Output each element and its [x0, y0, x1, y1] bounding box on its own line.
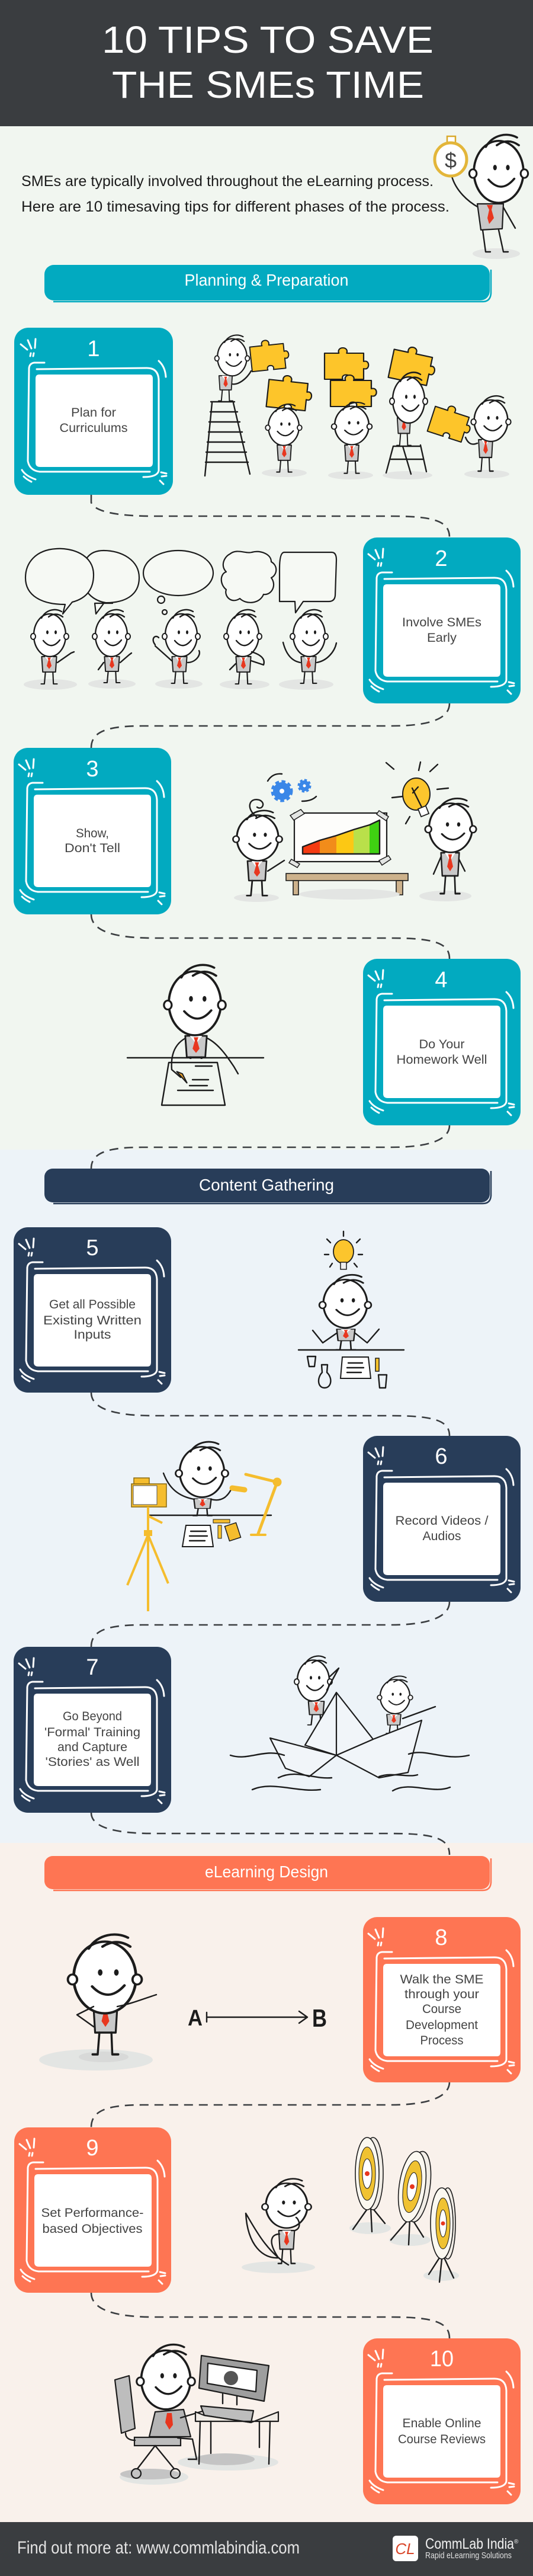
- card 7: go beyond formal training: 'Formal' Training: [44, 1726, 140, 1739]
- card 2: involve SMEs early: 2: [435, 546, 448, 571]
- card 8: walk the SME through: 8: [435, 1925, 448, 1950]
- heading band: planning & preparation: [44, 265, 491, 302]
- illustration: man recording video: [127, 1442, 280, 1611]
- illustration: men in paper boat: [230, 1656, 469, 1791]
- illustration: man doing homework: [127, 965, 264, 1105]
- man c: [153, 610, 203, 689]
- camera on tripod: [127, 1478, 168, 1611]
- man carrying puzzle piece: [262, 374, 313, 477]
- card 10: enable online course reviews: [363, 2338, 521, 2504]
- logo mark: CL: [395, 2540, 415, 2558]
- illustration: men with speech bubbles: [24, 549, 336, 690]
- man looking at the chart: [419, 798, 476, 901]
- card 9: set performance-based objectives: 9: [86, 2136, 99, 2161]
- chair: [115, 2376, 181, 2478]
- card 10: enable online course reviews: 10: [430, 2347, 454, 2372]
- card 9: set performance-based objectives: based Objectives: [43, 2222, 142, 2236]
- illustration: presenting a chart: [233, 762, 476, 902]
- man a: [24, 610, 77, 690]
- gears: [268, 774, 316, 801]
- target 2: [389, 2150, 435, 2246]
- footer: [0, 2522, 533, 2576]
- card 7: go beyond formal training: 7: [86, 1655, 99, 1680]
- background: content gathering section: [0, 1150, 533, 1843]
- illustration: man at computer: [115, 2344, 278, 2485]
- chart board: [289, 809, 391, 868]
- heading band: planning & preparation: Planning & Preparation: [185, 271, 348, 289]
- card 1: plan for curriculums: [14, 328, 173, 495]
- man holding puzzle piece: [428, 396, 511, 478]
- card 5: get all possible existing written inputs: [14, 1227, 171, 1393]
- target 1: [349, 2137, 391, 2234]
- card 10: enable online course reviews: Course Reviews: [398, 2433, 486, 2446]
- icon: man holding stopwatch: [435, 135, 528, 259]
- card 6: record videos / audios: Record Videos /: [396, 1514, 489, 1528]
- man e: [279, 610, 336, 690]
- A to B arrow: B: [312, 2004, 327, 2032]
- title: THE SMEs TIME: [112, 63, 424, 106]
- intro text: SMEs are typically involved throughout the eLearning process.: [21, 173, 434, 190]
- logo mark: [393, 2536, 418, 2561]
- illustration: archer and targets: [242, 2137, 459, 2282]
- heading band: content gathering: [44, 1169, 491, 1204]
- card 6: record videos / audios: [363, 1436, 521, 1602]
- microphone arm: [232, 1474, 280, 1535]
- card 3: show, don't tell: Don't Tell: [65, 841, 120, 855]
- brand name: ®: [514, 2539, 519, 2545]
- card 1: plan for curriculums: Plan for: [71, 406, 116, 420]
- card 8: walk the SME through: Course: [422, 2002, 461, 2016]
- A to B arrow: A: [188, 2006, 203, 2031]
- card 8: walk the SME through: Walk the SME: [400, 1973, 483, 1986]
- card 8: walk the SME through: through your: [404, 1988, 479, 2001]
- card 4: do your homework well: [363, 959, 521, 1125]
- light bulb: [325, 1231, 362, 1269]
- man on stool with puzzle piece: [383, 344, 438, 479]
- card 6: record videos / audios: 6: [435, 1444, 448, 1469]
- card 7: go beyond formal training: [14, 1647, 171, 1813]
- computer: [195, 2356, 278, 2464]
- card 7: go beyond formal training: 'Stories' as Well: [45, 1755, 140, 1769]
- card 5: get all possible existing written inputs: 5: [86, 1236, 99, 1260]
- illustration: man pointing at A to B: [39, 1935, 327, 2071]
- speech bubbles: [25, 549, 336, 615]
- connectors: [91, 495, 449, 2338]
- A to B arrow: [188, 2004, 327, 2032]
- card 4: do your homework well: 4: [435, 968, 448, 993]
- presenter: [233, 799, 284, 902]
- card 5: get all possible existing written inputs: Get all Possible: [49, 1298, 136, 1311]
- ladder man with puzzle piece: [205, 335, 290, 476]
- card 9: set performance-based objectives: Set Performance-: [41, 2206, 143, 2220]
- footer link text: Find out more at: www.commlabindia.com: [17, 2538, 300, 2558]
- archer: [242, 2179, 315, 2273]
- intro text: Here are 10 timesaving tips for different phases of the process.: [21, 199, 449, 215]
- target 3: [423, 2188, 459, 2282]
- illustration: team assembling puzzle: [205, 335, 511, 479]
- man carrying two puzzle pieces: [325, 348, 377, 479]
- background: planning section: [0, 126, 533, 1150]
- card 10: enable online course reviews: Enable Online: [403, 2417, 481, 2430]
- card 7: go beyond formal training: Go Beyond: [63, 1710, 122, 1723]
- card 1: plan for curriculums: Curriculums: [59, 421, 128, 435]
- card 4: do your homework well: Homework Well: [397, 1053, 487, 1067]
- light bulb: [386, 762, 448, 824]
- card 5: get all possible existing written inputs: Inputs: [73, 1328, 111, 1342]
- icon: man holding stopwatch: $: [445, 148, 457, 172]
- card 2: involve SMEs early: Involve SMEs: [402, 616, 481, 629]
- heading band: elearning design: [44, 1856, 491, 1890]
- title: 10 TIPS TO SAVE: [102, 18, 434, 61]
- card 6: record videos / audios: Audios: [423, 1529, 461, 1543]
- background: elearning design section: [0, 1843, 533, 2522]
- card 9: set performance-based objectives: [14, 2127, 171, 2293]
- card 8: walk the SME through: Process: [420, 2034, 463, 2047]
- brand name: Rapid eLearning Solutions: [425, 2551, 512, 2561]
- card 4: do your homework well: Do Your: [419, 1038, 465, 1051]
- brand name: [425, 2536, 519, 2561]
- card 7: go beyond formal training: and Capture: [57, 1740, 127, 1754]
- heading band: content gathering: Content Gathering: [199, 1176, 334, 1194]
- desk items: [307, 1356, 387, 1388]
- card 3: show, don't tell: 3: [86, 757, 99, 782]
- title: [102, 18, 434, 106]
- table: [286, 873, 408, 900]
- card 1: plan for curriculums: 1: [87, 337, 100, 361]
- illustration: man with idea at desk: [298, 1231, 404, 1388]
- card 3: show, don't tell: Show,: [76, 827, 109, 840]
- header: [0, 0, 533, 126]
- card 3: show, don't tell: [14, 748, 171, 914]
- card 2: involve SMEs early: Early: [427, 631, 457, 645]
- desk papers and tools: [182, 1519, 241, 1547]
- heading band: elearning design: eLearning Design: [205, 1863, 328, 1881]
- brand name: CommLab India: [425, 2536, 514, 2552]
- card 5: get all possible existing written inputs: Existing Written: [43, 1314, 142, 1327]
- intro text: [21, 173, 449, 215]
- card 8: walk the SME through: Development: [406, 2018, 478, 2032]
- man b: [88, 610, 136, 689]
- card 2: involve SMEs early: [363, 537, 521, 703]
- man d: [220, 610, 269, 689]
- card 8: walk the SME through: [363, 1917, 521, 2082]
